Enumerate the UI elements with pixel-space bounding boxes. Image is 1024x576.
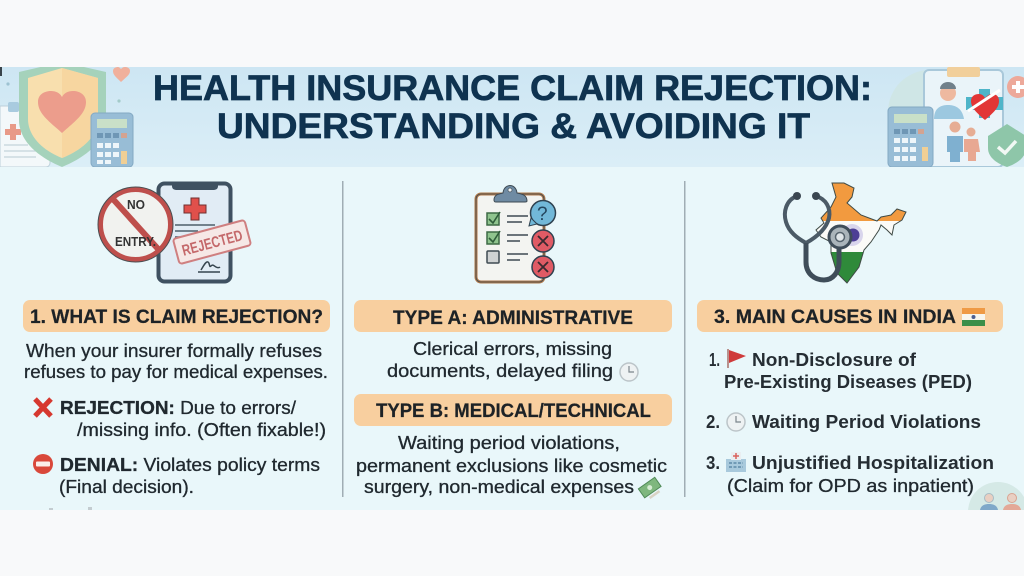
definition text: When your insurer formally refuses [26, 341, 322, 361]
title: UNDERSTANDING & AVOIDING IT [217, 107, 810, 146]
cause 1: 1. [709, 349, 720, 370]
cause 2: 2. [706, 411, 720, 432]
type B text [356, 433, 667, 497]
type B text: permanent exclusions like cosmetic [356, 456, 667, 476]
heading pill: what is claim rejection [23, 300, 330, 332]
divider right [684, 181, 686, 497]
cause 3: Unjustified Hospitalization [752, 452, 994, 473]
cause 1: Non-Disclosure of [752, 349, 917, 370]
definition text: refuses to pay for medical expenses. [24, 362, 328, 382]
rejection text: /missing info. (Often fixable!) [77, 420, 326, 440]
title: HEALTH INSURANCE CLAIM REJECTION: [153, 69, 872, 108]
denial text: (Final decision). [59, 477, 194, 497]
icon: hospital [726, 452, 746, 472]
panel: main causes in India [697, 180, 1003, 496]
heading pill: main causes [697, 300, 1003, 332]
icon: header left shield, heart, document and calculator [0, 62, 133, 167]
type A text: documents, delayed filing [387, 361, 613, 381]
rejection text: REJECTION: Due to errors/ [60, 398, 296, 418]
cause 3: 3. [706, 452, 720, 473]
rejection text [60, 398, 326, 440]
icon: no entry sign and rejected clipboard [98, 184, 251, 282]
cause 1 [709, 349, 972, 392]
decorative specks bottom left [49, 507, 92, 510]
heading pill: type A [354, 300, 672, 332]
icon: money with wings [638, 477, 663, 500]
type A text [387, 339, 613, 381]
heading pill: type B [354, 394, 672, 426]
icon: red cross mark [35, 399, 51, 416]
icon: no entry sign and rejected clipboard: REJECTED [180, 227, 245, 260]
heading pill: type B: TYPE B: MEDICAL/TECHNICAL [376, 401, 651, 422]
icon: clock [727, 413, 745, 431]
infographic body background [0, 67, 1024, 510]
icon: checklist clipboard [476, 186, 556, 282]
icon: clock [620, 363, 638, 381]
icon: people corner decoration [968, 482, 1024, 510]
definition text [24, 341, 328, 382]
denial text [59, 455, 320, 497]
cause 3 [706, 452, 994, 496]
icon: header right clipboard, family, calculator and shield [888, 67, 1024, 167]
type A text: Clerical errors, missing [413, 339, 612, 359]
type B text: surgery, non-medical expenses [364, 477, 634, 497]
divider left [342, 181, 344, 497]
header banner [0, 62, 1024, 167]
heading pill: type A: TYPE A: ADMINISTRATIVE [393, 308, 633, 329]
top left corner mark [0, 67, 2, 76]
type B text: Waiting period violations, [398, 433, 620, 453]
cause 1: Pre-Existing Diseases (PED) [724, 371, 972, 392]
cause 3: (Claim for OPD as inpatient) [727, 476, 974, 496]
icon: red flag [728, 349, 746, 368]
panel: what is claim rejection [23, 184, 330, 497]
icon: India flag [962, 308, 985, 326]
icon: checklist clipboard: ? [537, 204, 548, 225]
title [153, 69, 872, 146]
icon: no entry sign and rejected clipboard: ENTRY. [115, 234, 156, 249]
denial text: DENIAL: Violates policy terms [60, 455, 320, 475]
icon: no entry emoji [33, 454, 53, 474]
heading pill: main causes: 3. MAIN CAUSES IN INDIA [714, 307, 956, 328]
icon: no entry sign and rejected clipboard: NO [127, 197, 145, 212]
cause 2: Waiting Period Violations [752, 411, 981, 432]
heading pill: what is claim rejection: 1. WHAT IS CLAIM REJECTION? [30, 307, 323, 328]
icon: India map with stethoscope [785, 180, 910, 285]
panel: types of rejection [354, 186, 672, 500]
